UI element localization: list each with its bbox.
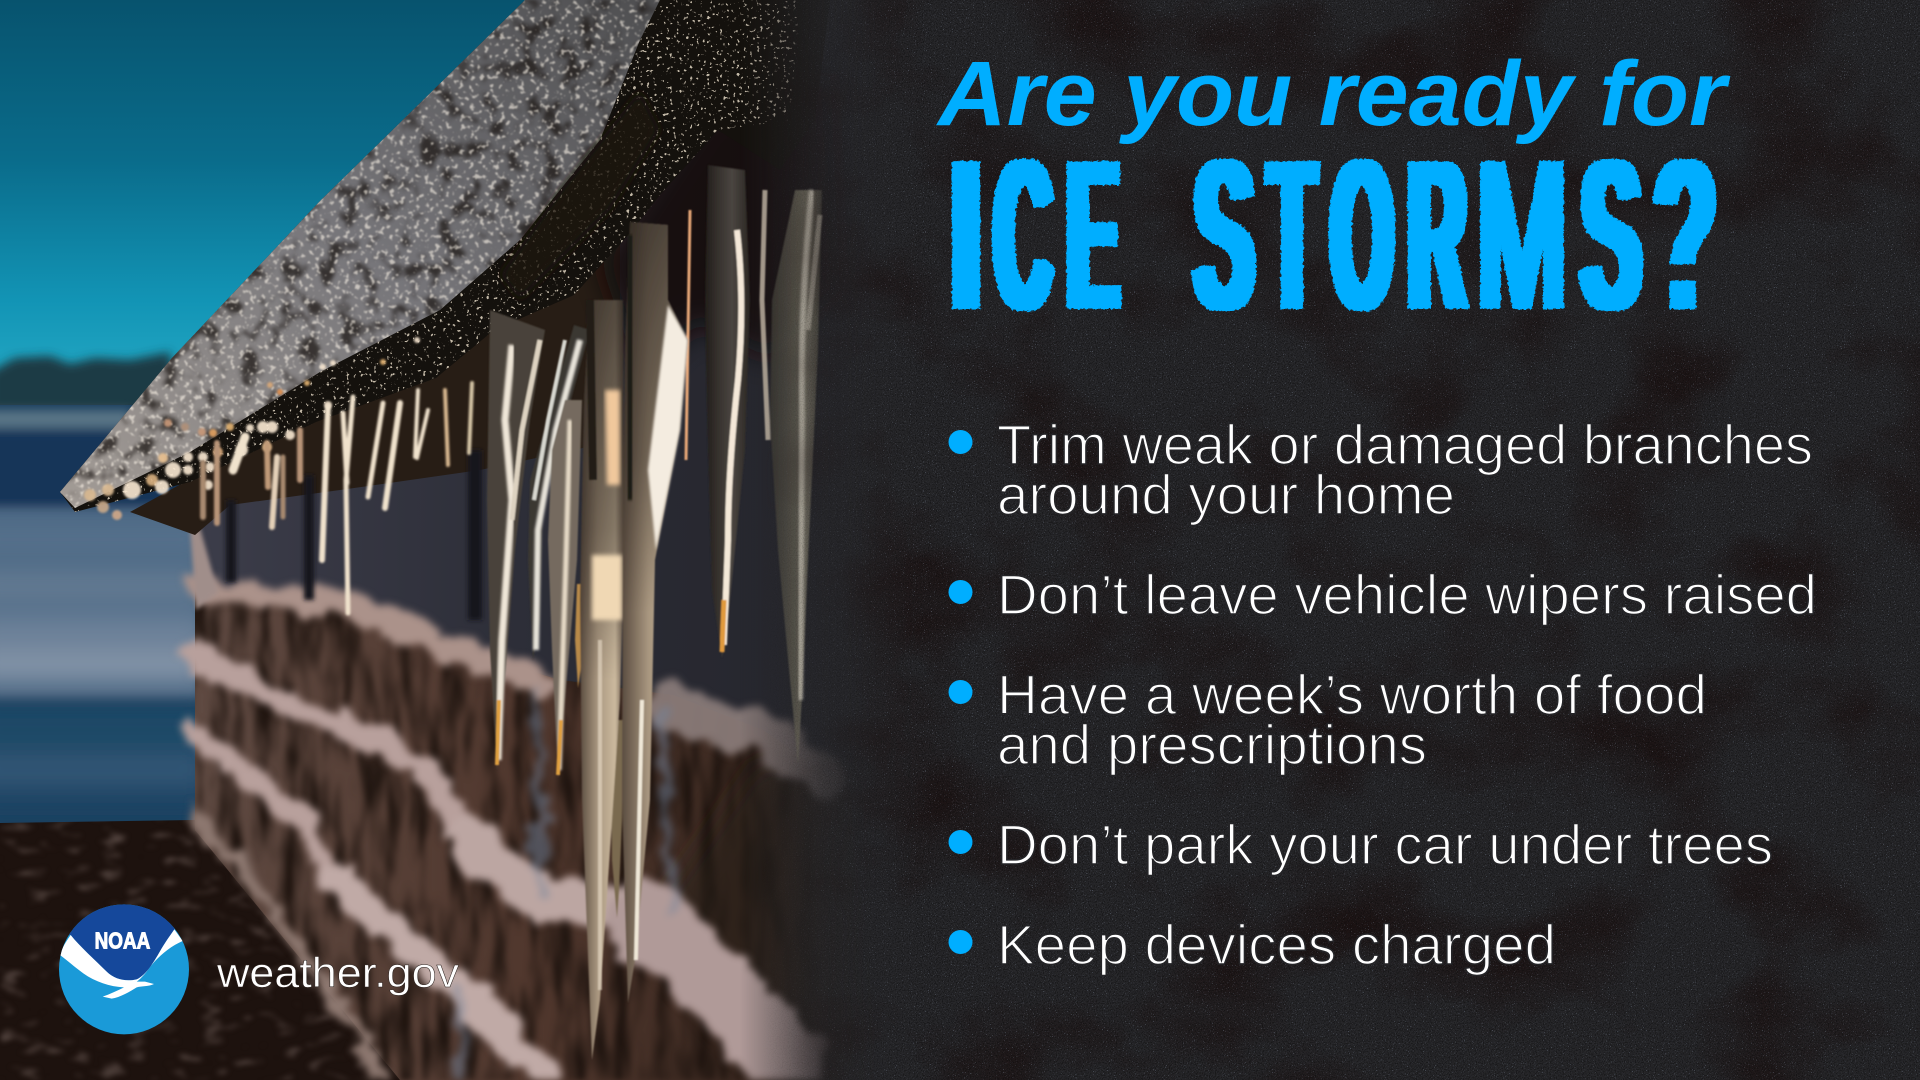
eave shadow and posts bbox=[130, 240, 620, 620]
bullet item: trim branches bbox=[948, 413, 1813, 526]
wall corner bbox=[190, 528, 218, 610]
icicle central bbox=[580, 300, 624, 1060]
title line two: T bbox=[1269, 115, 1315, 356]
wall texture speckle bbox=[740, 0, 1920, 1080]
title line two: C bbox=[994, 115, 1052, 355]
title bbox=[936, 43, 1730, 356]
distant tree line bbox=[0, 352, 180, 412]
icicle tall bright bbox=[622, 222, 688, 1003]
dark ground bbox=[0, 820, 400, 1080]
title line two: R bbox=[1408, 115, 1466, 355]
dark shadow behind the upper icicles bbox=[600, 70, 840, 380]
frozen field and water bbox=[0, 405, 210, 825]
small amber icicle bbox=[610, 720, 623, 918]
title line two: M bbox=[1477, 115, 1567, 356]
checklist bbox=[948, 413, 1817, 976]
bokeh highlights along the eave bbox=[84, 337, 420, 520]
title line two: ? bbox=[1653, 114, 1717, 355]
title line two: E bbox=[1067, 116, 1119, 356]
bullet item: wipers: Don’t leave vehicle wipers raised bbox=[997, 563, 1817, 626]
website label: weather.gov bbox=[216, 949, 459, 996]
icon: NOAA logo: NOAA bbox=[95, 927, 150, 953]
title line two: O bbox=[1331, 115, 1393, 355]
icicle right bbox=[686, 165, 768, 658]
title line two: I bbox=[950, 115, 982, 355]
roof bbox=[60, 0, 817, 512]
small icicles bbox=[203, 383, 472, 613]
icon: NOAA logo bbox=[59, 904, 189, 1034]
large icicles bbox=[487, 165, 822, 1060]
sky bbox=[0, 0, 540, 400]
icicle mid bbox=[548, 400, 582, 778]
amber sliver bbox=[575, 584, 583, 688]
icicle far right translucent bbox=[770, 190, 822, 765]
shed brick wall bbox=[195, 593, 808, 1080]
dark panel fading over the photo bbox=[740, 0, 1920, 1080]
snow on brick courses bbox=[190, 590, 825, 1080]
bullet item: trim branches: Trim weak or damaged branches bbox=[997, 413, 1813, 476]
bullet item: food and prescriptions bbox=[948, 663, 1707, 776]
icicle left long bbox=[487, 310, 545, 770]
bullet item: food and prescriptions: Have a week’s worth of food bbox=[997, 663, 1707, 726]
title line two bbox=[950, 114, 1717, 356]
title line one: Are you ready for bbox=[936, 43, 1730, 145]
bullet item: park car: Don’t park your car under trees bbox=[997, 813, 1773, 876]
title line two: S bbox=[1581, 115, 1641, 355]
bullet item: trim branches: around your home bbox=[997, 463, 1455, 526]
shed upper wall bbox=[195, 0, 880, 780]
bullet item: devices: Keep devices charged bbox=[997, 913, 1556, 976]
icicle narrow bent bbox=[528, 325, 590, 660]
bullet item: food and prescriptions: and prescriptions bbox=[997, 713, 1427, 776]
title line two: S bbox=[1194, 115, 1254, 355]
